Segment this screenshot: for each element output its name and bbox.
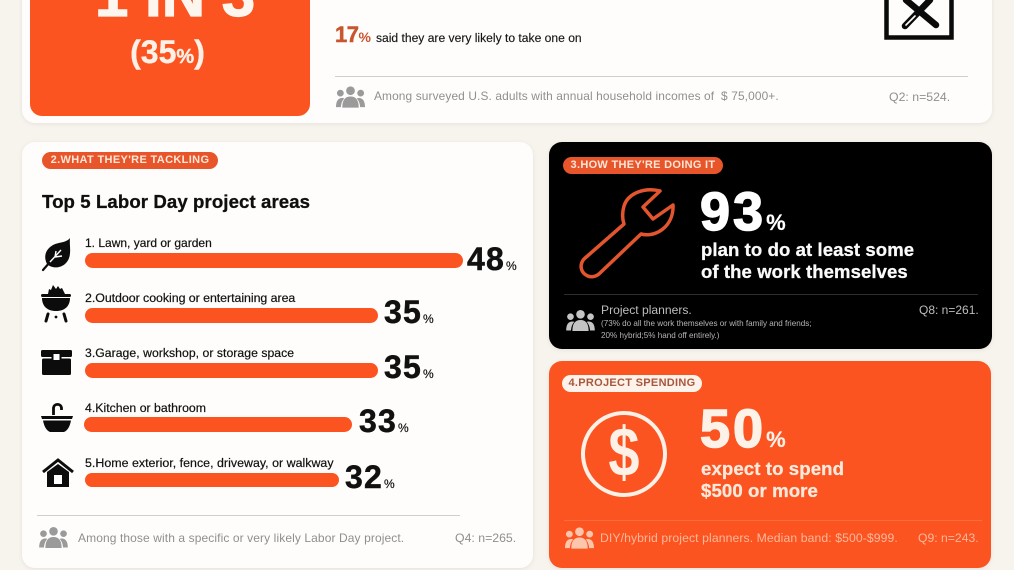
value: 33%: 33% xyxy=(359,403,409,439)
icon: sink xyxy=(41,403,73,432)
icon: people xyxy=(565,527,594,549)
panel: headline overview xyxy=(22,0,992,123)
icon: leaf xyxy=(42,238,70,272)
label: outdoor: 2.Outdoor cooking or entertaining area xyxy=(85,291,295,305)
divider xyxy=(564,294,978,295)
footnote: base: Project planners. xyxy=(601,303,692,317)
bar: outdoor 35% xyxy=(85,308,378,323)
stat description: of the work themselves xyxy=(701,261,908,282)
value: 35% outdoor: 35% xyxy=(384,294,434,330)
section tag xyxy=(562,375,702,392)
bar: lawn 48% xyxy=(85,253,463,268)
icon: house xyxy=(42,458,74,487)
icon: toolbox xyxy=(41,350,72,375)
icon: people xyxy=(39,527,68,548)
stat description xyxy=(701,458,844,501)
section tag: 3.HOW THEY'RE DOING IT xyxy=(571,159,715,171)
value: 32%: 32% xyxy=(345,459,395,495)
icon: tools in frame xyxy=(884,0,954,40)
footnote: sample: Q4: n=265. xyxy=(455,531,516,545)
footnote: sample: Q2: n=524. xyxy=(889,90,950,104)
label: exterior: 5.Home exterior, fence, driveway, or walkway xyxy=(85,456,334,470)
footnote: sample: Q9: n=243. xyxy=(918,531,979,545)
stat description: $500 or more xyxy=(701,480,818,501)
icon: dollar coin: $ xyxy=(608,414,640,491)
footnote: base: Among those with a specific or very likely Labor Day project. xyxy=(78,531,404,545)
section tag: 4.PROJECT SPENDING xyxy=(568,377,696,389)
stat description: expect to spend xyxy=(701,458,844,479)
stat: very likely: 17% said they are very likely to take one on xyxy=(335,22,582,47)
icon: people xyxy=(566,310,595,331)
section tag: 2.WHAT THEY'RE TACKLING xyxy=(51,154,209,166)
section tag xyxy=(42,152,218,169)
divider xyxy=(37,515,460,516)
divider xyxy=(564,520,982,521)
footnote: base: DIY/hybrid project planners. Median band: $500-$999. xyxy=(600,531,898,545)
label: lawn: 1. Lawn, yard or garden xyxy=(85,236,212,250)
stat: 50%: 50% xyxy=(700,399,786,459)
stat: 93%: 93% xyxy=(700,182,786,242)
stat percentage: (35%) xyxy=(130,34,205,70)
bar: garage 35% xyxy=(85,363,378,378)
panel: project spending xyxy=(549,361,991,568)
section tag xyxy=(563,157,723,174)
value: 35% garage: 35% xyxy=(384,349,434,385)
footnote: sample: Q8: n=261. xyxy=(919,303,979,317)
icon: dollar coin xyxy=(581,411,667,497)
footnote: breakdown: 20% hybrid;5% hand off entirely.) xyxy=(601,331,719,340)
heading: Top 5 Labor Day project areas xyxy=(42,191,310,212)
stat description: plan to do at least some xyxy=(701,239,914,260)
panel: how they're doing it xyxy=(549,142,992,349)
value: 48%: 48% xyxy=(467,241,517,277)
stat description xyxy=(701,239,914,282)
icon: wrench xyxy=(579,188,675,278)
bar: exterior 32% xyxy=(85,473,339,487)
panel: what they're tackling xyxy=(22,142,533,568)
label: garage: 3.Garage, workshop, or storage space xyxy=(85,346,294,360)
divider xyxy=(335,76,968,77)
panel: orange key stat xyxy=(30,0,310,116)
icon: people xyxy=(336,86,365,108)
icon: grill xyxy=(41,285,71,322)
footnote: base: Among surveyed U.S. adults with annual household incomes of $ 75,000+. xyxy=(374,89,779,103)
label: kitchen: 4.Kitchen or bathroom xyxy=(85,401,206,415)
footnote: breakdown: (73% do all the work themselves or with family and friends; xyxy=(601,319,812,328)
footnote: breakdown xyxy=(601,319,812,340)
bar: kitchen 33% xyxy=(84,417,352,432)
